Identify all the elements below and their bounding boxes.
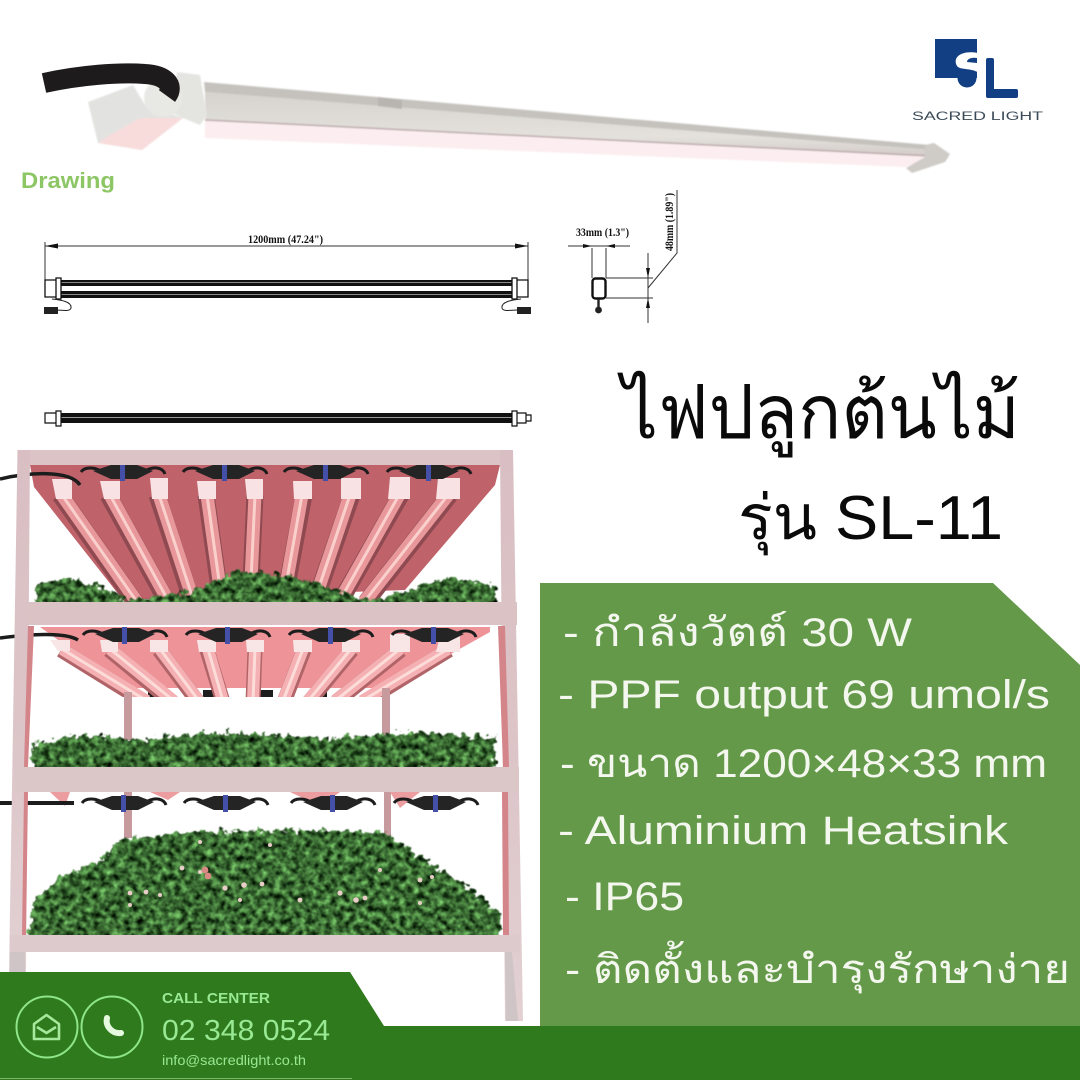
panel: specifications [540, 583, 1080, 1026]
spec list: - ติดตั้งและบำรุงรักษาง่าย [565, 940, 1070, 994]
tier 3 connectors [0, 795, 478, 812]
power cable [44, 73, 170, 96]
height label: 48mm (1.89") [664, 193, 676, 251]
tier 2 lighting panel [40, 627, 490, 688]
contact text: 02 348 0524 [162, 1015, 330, 1047]
tier 2 light bars [50, 634, 460, 702]
technical drawing: side view with dimensions [568, 190, 677, 323]
driver box [88, 72, 207, 150]
width label: 33mm (1.3") [576, 227, 629, 239]
icon: phone [82, 996, 142, 1058]
footer: contact bar [0, 972, 1080, 1080]
dimension label: 1200mm (47.24") [248, 234, 323, 246]
technical drawing: front view with dimension [44, 234, 531, 314]
tier 1 lighting panel [30, 465, 500, 600]
tier 2 black end tabs [148, 690, 327, 697]
tier 3 plants [28, 830, 502, 940]
rear posts [124, 688, 391, 838]
aluminium rail [204, 82, 950, 173]
tier 2 connectors [0, 627, 476, 644]
illustration: shelving rack with grow lights and plants [0, 450, 523, 1021]
tier 3 panel remnants [50, 792, 420, 808]
logo mark [935, 39, 1018, 98]
contact text: info@sacredlight.co.th [162, 1052, 306, 1068]
spec list: - กำลังวัตต์ 30 W [563, 610, 912, 655]
title line 2: รุ่น SL-11 [738, 484, 1003, 555]
spec list [558, 610, 1070, 994]
title line 1: ไฟปลูกต้นไม้ [617, 370, 1020, 458]
tier 1 plants [36, 570, 495, 606]
heading: product title [617, 370, 1020, 555]
tier 1 light bars [52, 477, 460, 602]
logo: Sacred Light [912, 39, 1043, 123]
spec list: - IP65 [565, 875, 684, 919]
spec list: - PPF output 69 umol/s [558, 673, 1050, 717]
tier 2 plants [32, 732, 495, 771]
logo wordmark: SACRED LIGHT [912, 111, 1043, 123]
technical drawing: top view bar [45, 411, 531, 426]
contact text [162, 990, 330, 1068]
tier 1 connectors [0, 464, 471, 485]
spec list: - ขนาด 1200×48×33 mm [560, 742, 1047, 786]
heading: Drawing: Drawing [21, 168, 115, 193]
tier 3 flowers [128, 840, 434, 907]
contact text: CALL CENTER [162, 990, 270, 1007]
icon: envelope [16, 996, 78, 1058]
rack frame [9, 450, 523, 1021]
spec list: - Aluminium Heatsink [558, 809, 1009, 853]
product photo: LED grow light bar [44, 72, 950, 173]
